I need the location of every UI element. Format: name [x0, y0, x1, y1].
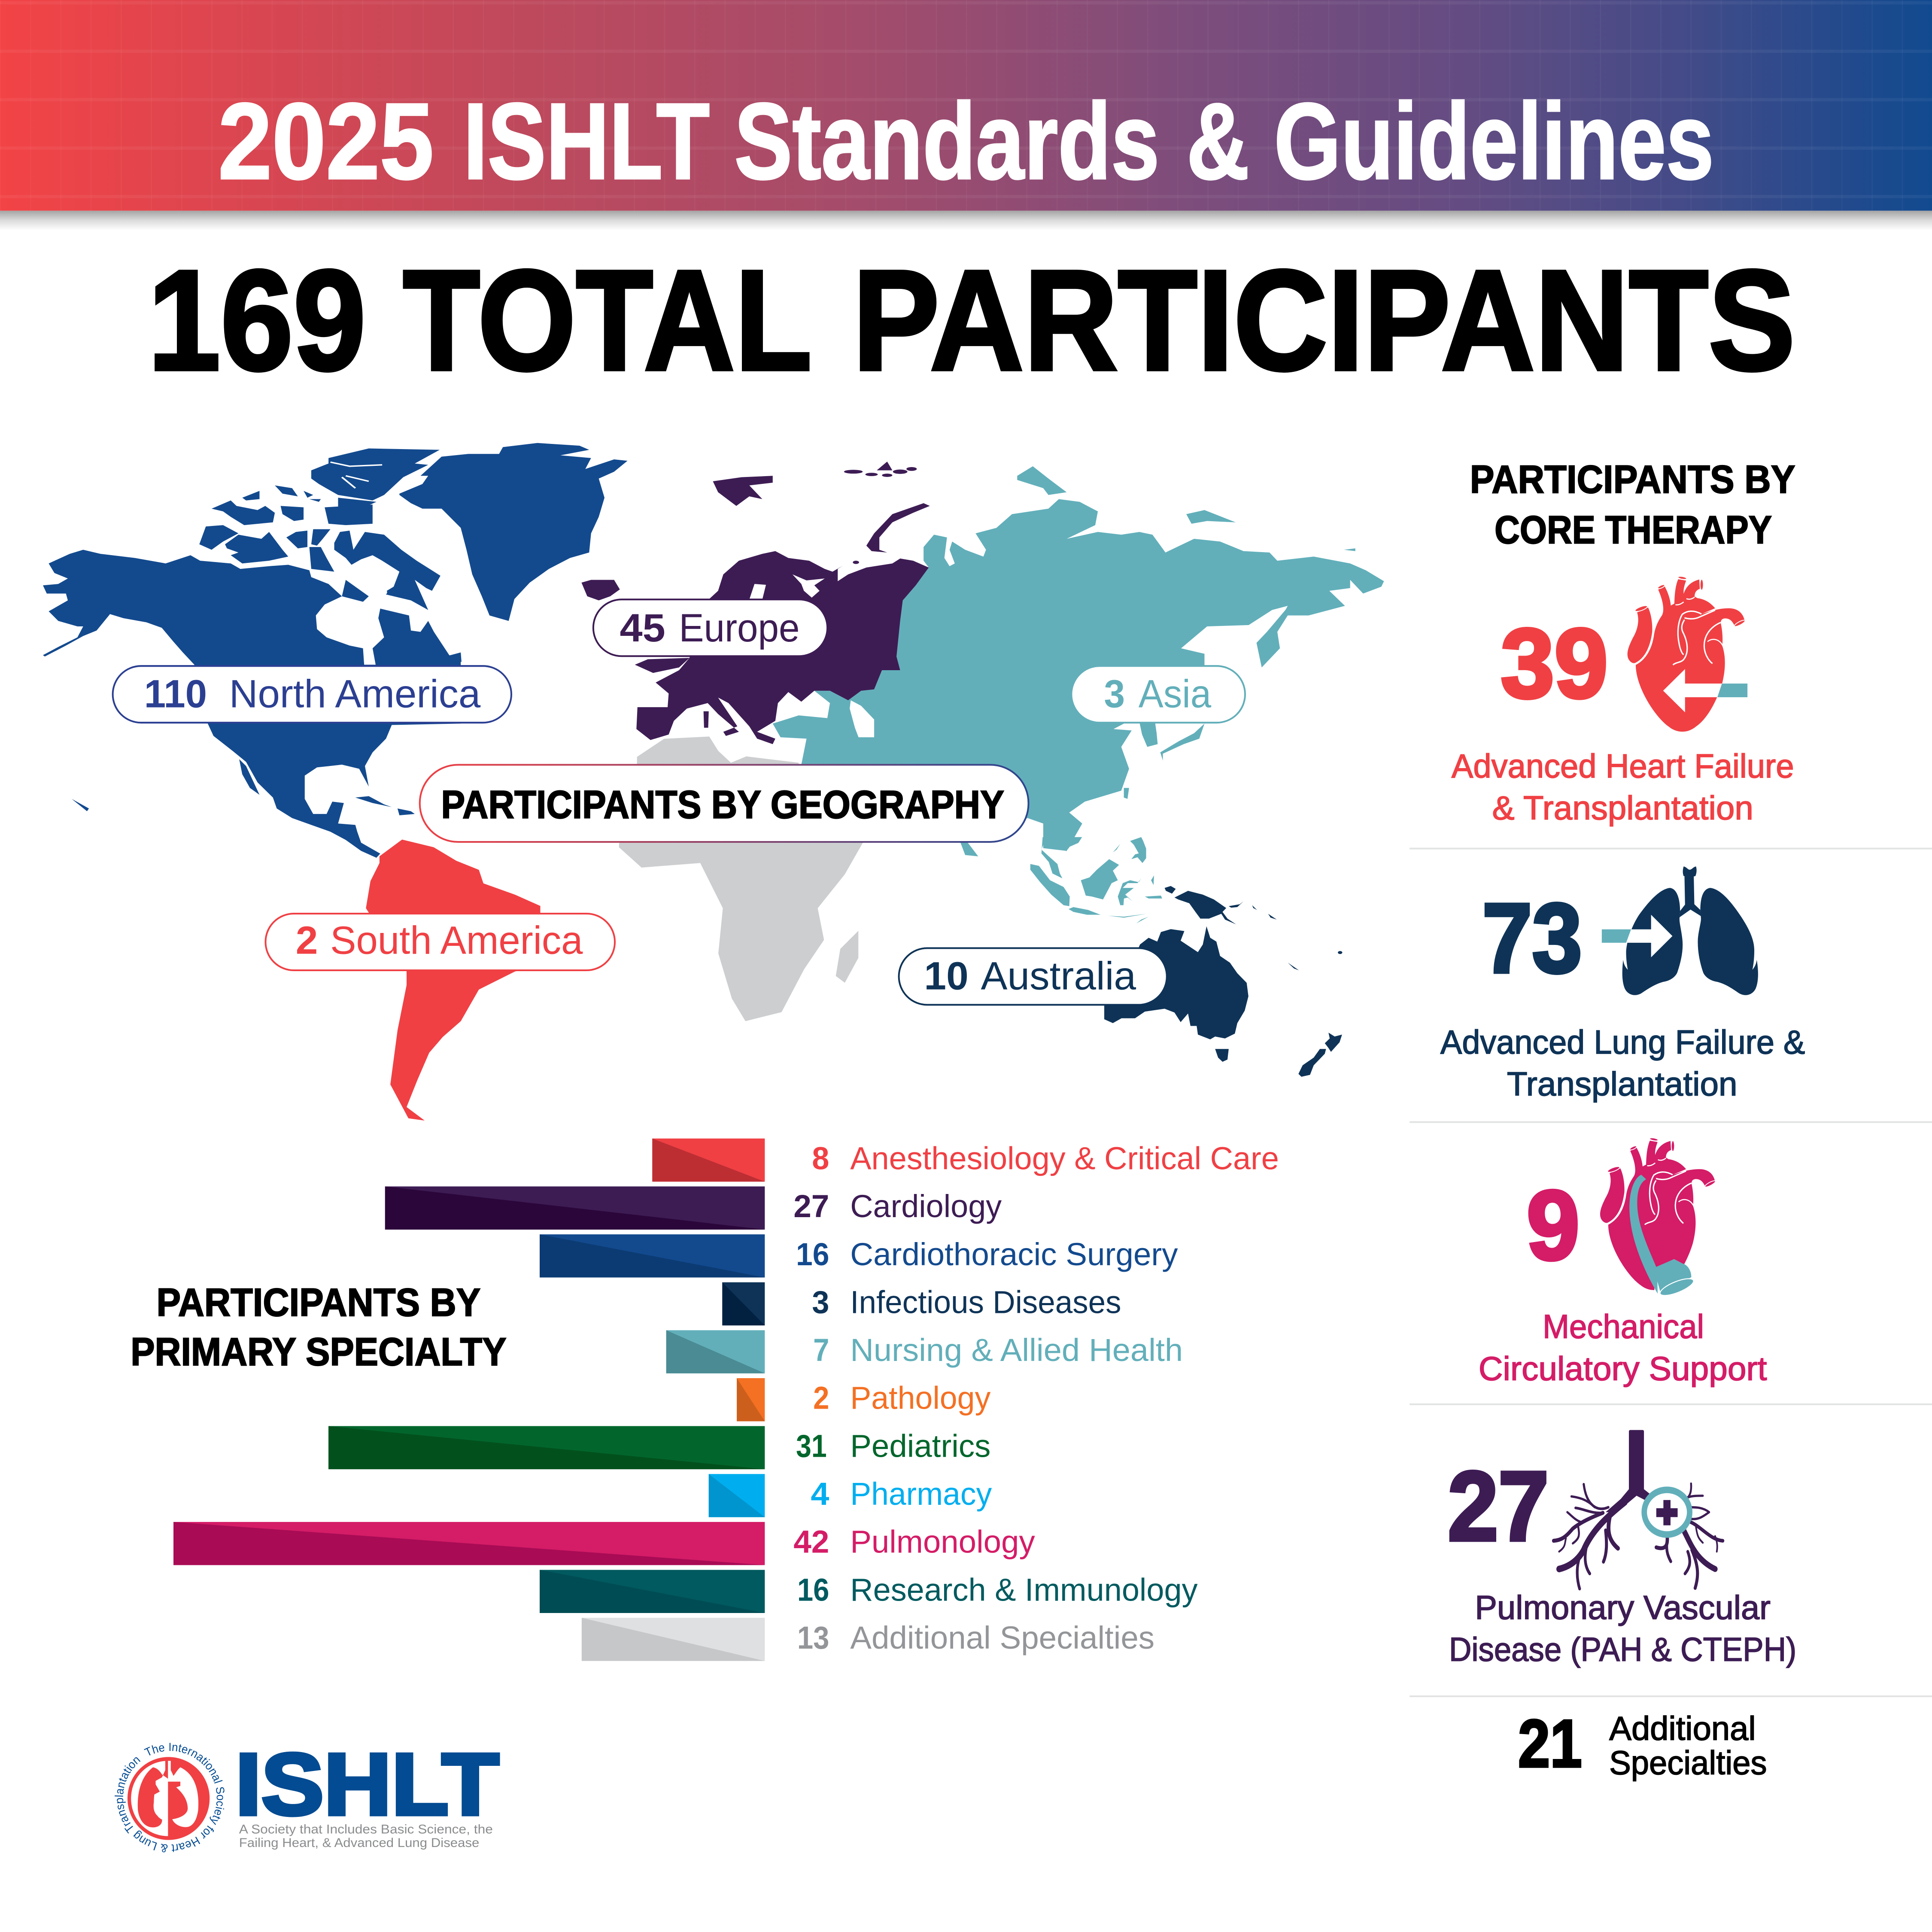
- map: Europe: [635, 462, 930, 744]
- callout: Europe: [593, 599, 827, 656]
- logo tagline: Failing Heart, & Advanced Lung Disease: [239, 1836, 479, 1850]
- stat: advanced heart failure: & Transplantation: [1492, 790, 1753, 826]
- stat: advanced heart failure: Advanced Heart Failure: [1452, 748, 1794, 785]
- stat: additional specialties: [1518, 1706, 1767, 1782]
- icon: bronchial tree with magnifier: [1554, 1430, 1723, 1589]
- bar: Pediatrics: 31: [796, 1428, 827, 1464]
- heading: participants by geography: [420, 765, 1029, 842]
- stat: pulmonary vascular disease: [1448, 1430, 1796, 1668]
- bar: Anesthesiology & Critical Care: [652, 1139, 1279, 1182]
- stat: advanced lung failure: [1440, 866, 1805, 1103]
- map: South America: [366, 839, 540, 1121]
- map: Asia: [773, 466, 1384, 857]
- callout: Asia: Asia: [1139, 672, 1212, 716]
- bar: Pediatrics: Pediatrics: [850, 1428, 990, 1464]
- stat: advanced lung failure: Transplantation: [1507, 1066, 1738, 1103]
- logo tagline: A Society that Includes Basic Science, the: [239, 1822, 493, 1836]
- callout: Asia: [1071, 666, 1245, 723]
- stat: advanced heart failure: 39: [1501, 608, 1608, 718]
- panel: participants by primary specialty: [131, 1139, 1279, 1661]
- bar: Nursing & Allied Health: 7: [813, 1332, 829, 1368]
- title: Standards: [734, 80, 1160, 202]
- icon: heart with LVAD: [1600, 1137, 1716, 1300]
- stat: mechanical circulatory support: Mechanical: [1543, 1309, 1704, 1346]
- stat: pulmonary vascular disease: Disease (PAH & CTEPH): [1449, 1631, 1796, 1668]
- bar: Nursing & Allied Health: [666, 1330, 1183, 1373]
- callout: Australia: [899, 948, 1167, 1005]
- icon: heart with arrow: [1628, 576, 1747, 732]
- bar: Cardiothoracic Surgery: [540, 1234, 1178, 1278]
- bar: Pharmacy: 4: [811, 1476, 829, 1512]
- heading: primary specialty: PRIMARY SPECIALTY: [131, 1330, 507, 1374]
- callout: South America: [265, 914, 615, 970]
- bar: Cardiology: 27: [793, 1188, 829, 1224]
- stat: pulmonary vascular disease: Pulmonary Vascular: [1475, 1589, 1771, 1626]
- callout: Europe: Europe: [679, 606, 800, 650]
- bar: Pharmacy: Pharmacy: [850, 1476, 992, 1512]
- title: 2025: [218, 80, 434, 202]
- map: Southeast Asia islands: [1030, 837, 1162, 923]
- callout: North America: [113, 666, 511, 723]
- bar: Nursing & Allied Health: Nursing & Allied Health: [850, 1332, 1183, 1368]
- heading: participants by geography: PARTICIPANTS BY GEOGRAPHY: [441, 783, 1004, 827]
- title: Guidelines: [1274, 80, 1714, 202]
- callout: Australia: Australia: [981, 954, 1136, 998]
- heading: core therapy: PARTICIPANTS BY: [1470, 458, 1795, 501]
- bar: Cardiothoracic Surgery: 16: [796, 1236, 829, 1272]
- heading: primary specialty: [131, 1281, 507, 1374]
- bar: Additional Specialties: [582, 1618, 1154, 1661]
- title: ISHLT: [463, 80, 710, 202]
- bar: Research & Immunology: 16: [797, 1571, 829, 1607]
- total participants headline: TOTAL: [403, 240, 812, 400]
- heading: core therapy: CORE THERAPY: [1495, 508, 1772, 552]
- bar: Infectious Diseases: Infectious Diseases: [850, 1284, 1121, 1320]
- bar: Anesthesiology & Critical Care: 8: [812, 1140, 829, 1176]
- callout: North America: North America: [229, 672, 481, 716]
- stat: advanced lung failure: Advanced Lung Failure &: [1440, 1024, 1805, 1061]
- bar: Pulmonology: Pulmonology: [850, 1524, 1035, 1560]
- total participants headline: PARTICIPANTS: [853, 240, 1795, 400]
- map: Greenland: [399, 443, 628, 621]
- panel: participants by geography map: [43, 443, 1384, 1121]
- callout: Europe: 45: [620, 606, 665, 650]
- bar: Infectious Diseases: [722, 1282, 1121, 1325]
- bar: Pulmonology: 42: [793, 1524, 829, 1560]
- map: North America: [43, 449, 587, 858]
- stat: additional specialties: Additional: [1609, 1710, 1756, 1747]
- bar: Pediatrics: [328, 1426, 990, 1469]
- stat: additional specialties: Specialties: [1609, 1745, 1767, 1782]
- stat: mechanical circulatory support: Circulatory Support: [1479, 1350, 1767, 1387]
- bar: Anesthesiology & Critical Care: Anesthesiology & Critical Care: [850, 1140, 1279, 1176]
- stat: advanced lung failure: 73: [1482, 883, 1582, 993]
- title: [218, 80, 1714, 202]
- stat: advanced heart failure: [1452, 576, 1794, 826]
- map: Iceland: [581, 580, 620, 600]
- bar: Pathology: 2: [813, 1380, 829, 1416]
- stat: pulmonary vascular disease: 27: [1448, 1451, 1549, 1561]
- heading: core therapy: [1470, 458, 1795, 552]
- stat: additional specialties: 21: [1518, 1706, 1582, 1781]
- bar: Cardiothoracic Surgery: Cardiothoracic Surgery: [850, 1236, 1178, 1272]
- title: &: [1187, 80, 1249, 202]
- stat: mechanical circulatory support: 9: [1527, 1170, 1580, 1280]
- bar: Additional Specialties: 13: [797, 1619, 829, 1656]
- bar: Research & Immunology: [540, 1570, 1198, 1613]
- bar: Cardiology: [385, 1186, 1002, 1230]
- logo wordmark: ISHLT: [235, 1736, 499, 1833]
- map: Africa: [619, 736, 863, 1021]
- bar: Pharmacy: [709, 1474, 992, 1517]
- bar: Research & Immunology: Research & Immunology: [850, 1571, 1198, 1607]
- bar: Infectious Diseases: 3: [812, 1284, 829, 1320]
- logo tagline: [239, 1822, 493, 1850]
- map: Australia and Oceania: [1104, 886, 1342, 1077]
- icon: lungs with arrow: [1602, 866, 1758, 995]
- total participants headline: [148, 240, 1795, 400]
- total participants headline: 169: [148, 240, 366, 400]
- bar: Pathology: [737, 1378, 991, 1421]
- callout: Asia: 3: [1104, 672, 1125, 716]
- bar: Pathology: Pathology: [850, 1380, 991, 1416]
- panel: participants by core therapy: [1410, 458, 1932, 1782]
- section dividers group: [1410, 848, 1932, 1697]
- heading: primary specialty: PARTICIPANTS BY: [156, 1281, 480, 1324]
- callout: South America: 2: [296, 918, 318, 962]
- logo: ISHLT: [112, 1736, 499, 1855]
- callout: Australia: 10: [924, 954, 969, 998]
- bar: Cardiology: Cardiology: [850, 1188, 1002, 1224]
- stat: mechanical circulatory support: [1479, 1137, 1767, 1387]
- bar: Pulmonology: [173, 1522, 1035, 1565]
- callout: South America: South America: [330, 918, 583, 962]
- header banner: [0, 0, 1932, 231]
- bar: Additional Specialties: Additional Specialties: [850, 1619, 1154, 1656]
- logo seal: The International Society for Heart & Lung Transplantation: [112, 1740, 228, 1855]
- callout: North America: 110: [144, 672, 207, 716]
